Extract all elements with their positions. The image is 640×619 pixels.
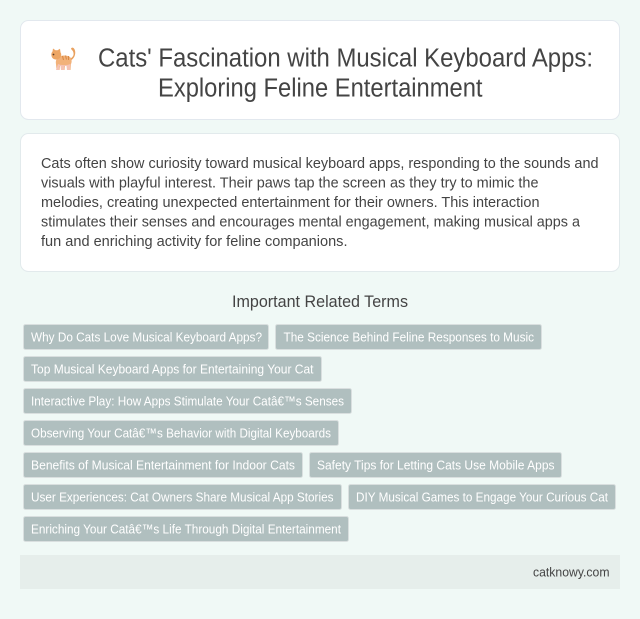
tag 8: User Experiences: Cat Owners Share Musical App Stories	[31, 490, 334, 504]
tags: related terms	[24, 324, 616, 542]
tag 2: The Science Behind Feline Responses to Music	[284, 330, 534, 344]
footer: catknowy.com	[533, 564, 610, 580]
text block: description: melodies, creating unexpected entertainment for their owners. This interaction	[41, 195, 540, 211]
title	[98, 44, 593, 102]
tag 10: Enriching Your Catâ€™s Life Through Digital Entertainment	[31, 522, 341, 536]
text block: description: stimulates their senses and encourages mental engagement, making musical apps a	[41, 214, 581, 230]
tag 6: Benefits of Musical Entertainment for Indoor Cats	[31, 458, 295, 472]
text block: description	[41, 156, 598, 250]
tag 10	[24, 516, 348, 542]
panel: title card	[20, 20, 620, 120]
tag 4: Interactive Play: How Apps Stimulate Your Catâ€™s Senses	[31, 394, 344, 408]
panel: description	[20, 134, 620, 272]
tag 1: Why Do Cats Love Musical Keyboard Apps?	[31, 330, 262, 344]
tag 2	[276, 324, 542, 350]
tag 3: Top Musical Keyboard Apps for Entertaining Your Cat	[31, 362, 314, 376]
tag 6	[24, 452, 302, 478]
tag 1	[24, 324, 268, 350]
heading: related terms: Important Related Terms	[232, 293, 408, 311]
title: Exploring Feline Entertainment	[158, 74, 482, 102]
tag 7: Safety Tips for Letting Cats Use Mobile Apps	[317, 458, 555, 472]
tag 4	[24, 388, 352, 414]
tag 5	[24, 420, 338, 446]
icon: cat	[51, 48, 75, 70]
text block: description: Cats often show curiosity toward musical keyboard apps, responding to the sounds and	[41, 156, 598, 172]
title: Cats' Fascination with Musical Keyboard Apps:	[98, 44, 593, 72]
footer	[20, 555, 620, 589]
tag 9	[348, 484, 616, 510]
tag 9: DIY Musical Games to Engage Your Curious Cat	[356, 490, 608, 504]
text block: description: fun and enriching activity for feline companions.	[41, 234, 348, 250]
tag 5: Observing Your Catâ€™s Behavior with Digital Keyboards	[31, 426, 331, 440]
tag 3	[24, 356, 322, 382]
text block: description: visuals with playful interest. Their paws tap the screen as they try to mimic the	[41, 176, 538, 192]
tag 7	[310, 452, 562, 478]
tag 8	[24, 484, 342, 510]
